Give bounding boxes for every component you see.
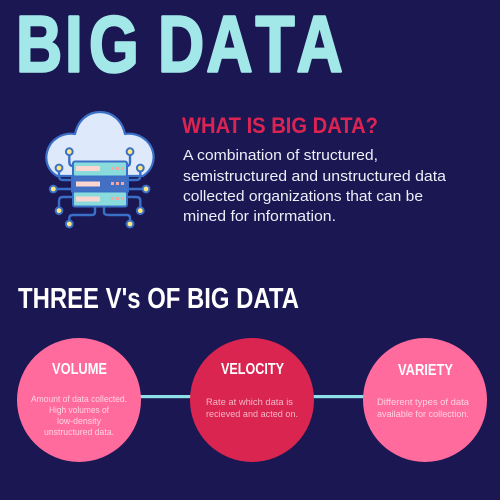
circuit nodes: [50, 148, 149, 227]
velocity text: [206, 397, 298, 420]
variety text: available for collection.: [377, 409, 469, 420]
text block: definition: semistructured and unstructured data: [183, 168, 447, 185]
variety text: [377, 397, 470, 420]
text block: definition: [183, 147, 447, 225]
server stack: [72, 162, 128, 206]
server lights: [76, 166, 100, 202]
variety heading: VARIETY: [398, 362, 453, 379]
circuit lines: [53, 152, 146, 224]
volume text: High volumes of: [49, 405, 109, 416]
text block: definition: collected organizations that can be: [183, 188, 423, 205]
text block: definition: mined for information.: [183, 208, 336, 225]
panel: variety: [363, 338, 487, 462]
heading: what is big data: WHAT IS BIG DATA?: [182, 113, 378, 138]
text block: definition: A combination of structured,: [183, 147, 378, 164]
volume text: unstructured data.: [44, 427, 114, 438]
connector: volume to velocity: [140, 395, 192, 398]
variety text: Different types of data: [377, 397, 470, 408]
panel: volume: [17, 338, 141, 462]
title: BIG DATA: [16, 0, 343, 89]
volume text: low-density: [57, 416, 101, 427]
velocity heading: VELOCITY: [221, 361, 284, 378]
icon: cloud server: [46, 112, 154, 227]
panel: velocity: [190, 338, 314, 462]
velocity text: recieved and acted on.: [206, 409, 298, 420]
velocity text: Rate at which data is: [206, 397, 293, 408]
volume heading: VOLUME: [52, 361, 107, 378]
heading: three Vs: THREE V's OF BIG DATA: [18, 283, 299, 315]
connector: velocity to variety: [313, 395, 365, 398]
volume text: Amount of data collected.: [31, 394, 127, 405]
volume text: [31, 394, 127, 438]
cloud: [46, 112, 154, 176]
